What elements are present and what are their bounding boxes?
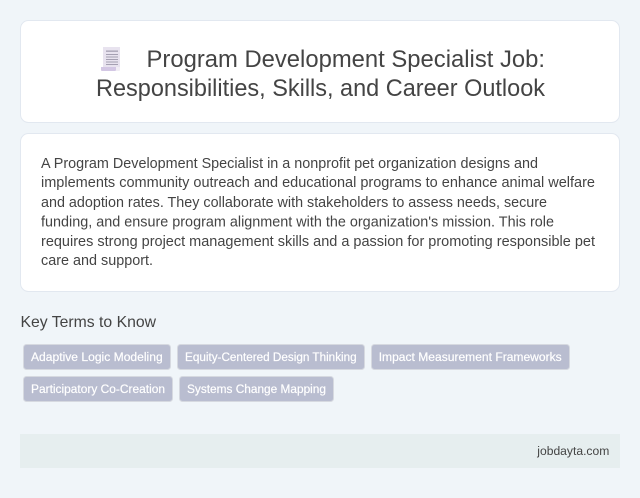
description text <box>41 156 595 269</box>
description text: requires strong project management skills and a passion for promoting responsible pet <box>41 234 595 250</box>
chip: impact measurement frameworks: Impact Measurement Frameworks <box>379 350 562 364</box>
icon: paper scroll <box>101 47 120 71</box>
description text: A Program Development Specialist in a nonprofit pet organization designs and <box>41 156 538 172</box>
description text: funding, and ensure program alignment with the organization's mission. This role <box>41 214 554 230</box>
description text: implements community outreach and educational programs to enhance animal welfare <box>41 175 595 191</box>
footer bar: jobdayta.com <box>536 444 609 458</box>
title: Responsibilities, Skills, and Career Outlook <box>96 75 546 102</box>
footer bar <box>20 434 620 468</box>
chip: equity-centered design thinking: Equity-Centered Design Thinking <box>185 350 357 364</box>
panel: description card <box>20 134 620 292</box>
title: Program Development Specialist Job: <box>146 46 545 73</box>
description text: and adoption rates. They collaborate with stakeholders to assess needs, secure <box>41 195 547 211</box>
heading: key terms: Key Terms to Know <box>20 314 156 331</box>
chip: adaptive logic modeling <box>24 344 170 370</box>
description text: care and support. <box>41 253 153 269</box>
chip: participatory co-creation: Participatory Co-Creation <box>31 382 165 396</box>
panel: title card <box>20 20 620 122</box>
chip: impact measurement frameworks <box>372 344 570 370</box>
chip: equity-centered design thinking <box>178 344 364 370</box>
chip: participatory co-creation <box>24 376 172 402</box>
chip: adaptive logic modeling: Adaptive Logic Modeling <box>31 350 163 364</box>
chip: systems change mapping <box>180 376 334 402</box>
chip: systems change mapping: Systems Change Mapping <box>187 382 326 396</box>
title <box>96 46 546 102</box>
